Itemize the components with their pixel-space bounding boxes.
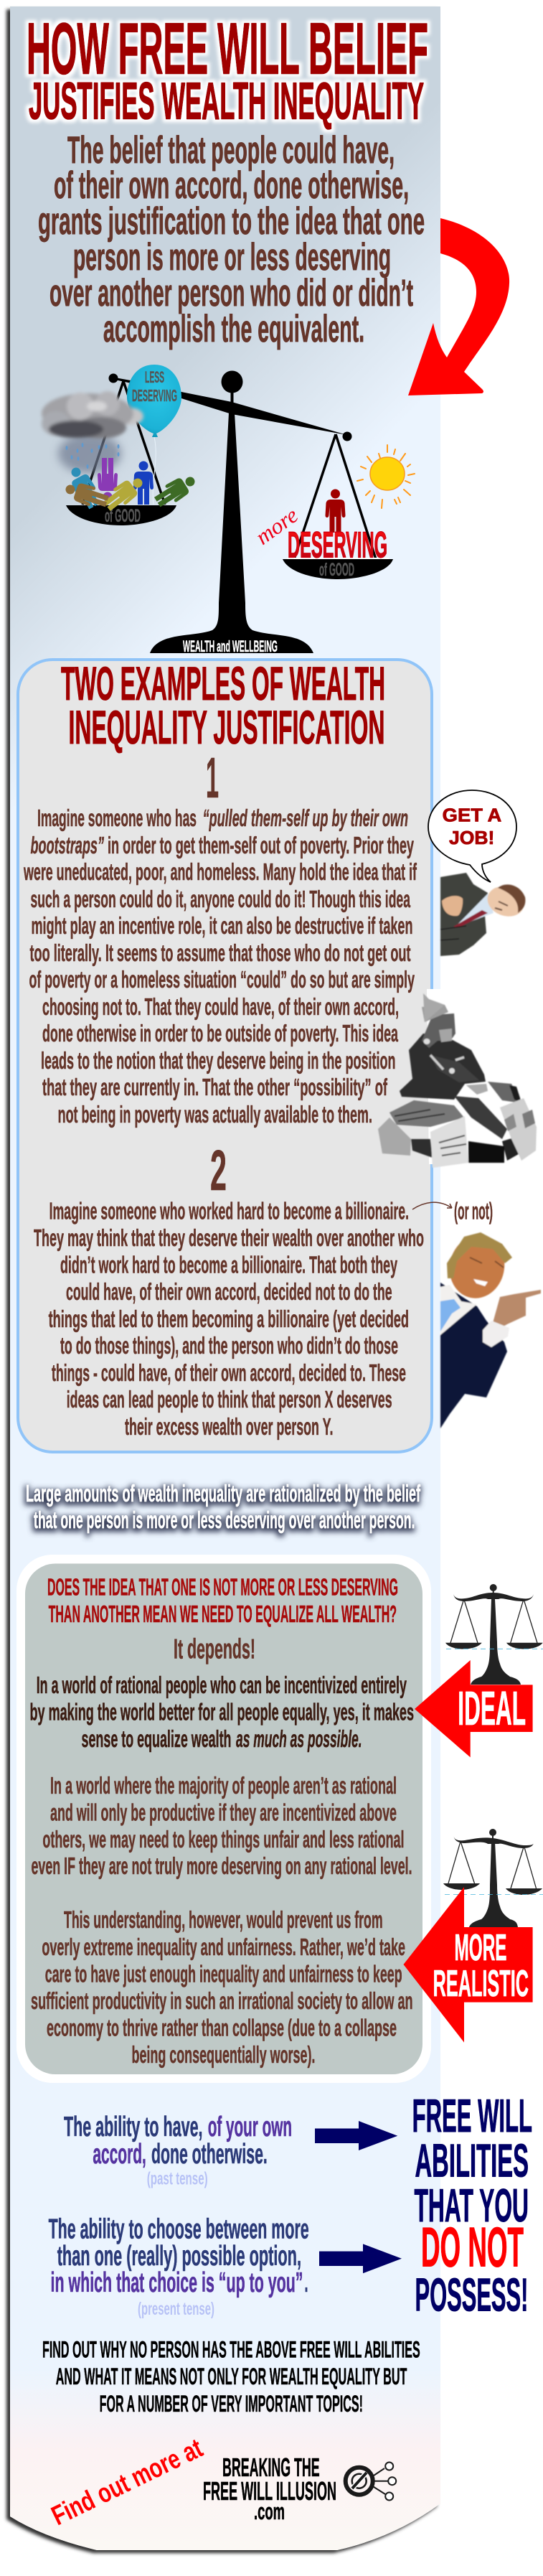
infographic: (or not) [454, 1198, 493, 1224]
definition: present tense ability: (present tense) [138, 2299, 214, 2319]
annotation: or not [412, 1198, 493, 1224]
balloon: less deserving [127, 365, 181, 505]
definition: present tense ability: The ability to choose between more [49, 2214, 309, 2245]
call to action text [42, 2337, 420, 2417]
balance scale illustration: of GOOD [105, 506, 141, 526]
people on left pan [62, 458, 199, 515]
intro text [38, 129, 425, 350]
cloud [42, 391, 143, 439]
website name [203, 2453, 336, 2524]
website name: BREAKING THE [222, 2453, 320, 2482]
statement: abilities you do not possess [412, 2089, 532, 2320]
numeral 2: 2 [210, 1138, 227, 1202]
icon: curved red arrow [408, 218, 509, 395]
example 1 text [23, 805, 417, 1128]
definition: present tense ability [49, 2214, 309, 2319]
definition: present tense ability: in which that choice is “up to you” [50, 2267, 303, 2298]
definition: past tense ability [64, 2112, 292, 2189]
panel lower fade [10, 2369, 440, 2550]
panel shadow [6, 9, 437, 2553]
balance scale illustration: of GOOD [319, 560, 354, 580]
arrow: present tense [319, 2244, 402, 2273]
definition: past tense ability: (past tense) [147, 2169, 208, 2189]
definition: past tense ability: accord, [93, 2139, 146, 2170]
speech bubble: get a job: JOB! [449, 827, 494, 848]
website name: FREE WILL ILLUSION [203, 2476, 336, 2506]
ideal paragraph: as much as possible. [236, 1725, 362, 1752]
infographic: 1 [206, 746, 219, 810]
realistic paragraph [32, 1772, 412, 1879]
website name: .com [254, 2498, 285, 2524]
panel: question box [16, 1555, 431, 2083]
example 2 text [34, 1198, 424, 1440]
arrow: past tense [315, 2121, 397, 2150]
example 1 text: bootstraps” [30, 832, 104, 858]
arrow: ideal [415, 1660, 533, 1757]
icon: balanced scale [445, 1584, 543, 1685]
person on right pan [326, 490, 346, 533]
illustration: billionaire pointing [440, 1230, 541, 1428]
definition: past tense ability: done otherwise. [151, 2139, 268, 2170]
understanding paragraph: being consequentially worse). [132, 2041, 315, 2068]
ideal paragraph [30, 1672, 414, 1752]
arrow: more realistic [403, 1887, 533, 2043]
definition: present tense ability: than one (really) possible option, [57, 2241, 301, 2272]
understanding paragraph [31, 1906, 413, 2068]
more deserving label: more [251, 502, 303, 550]
balance scale illustration [42, 365, 415, 655]
rain [58, 434, 121, 474]
scale beam and stand [66, 370, 393, 653]
example 1 text: Imagine someone who has [37, 805, 197, 831]
callout: wealth inequality rationalized [26, 1480, 421, 1533]
title [27, 9, 428, 131]
icon: logo [346, 2462, 396, 2501]
icon: sun [357, 445, 415, 508]
illustration: man pointing [440, 873, 528, 956]
balance scale illustration: WEALTH and WELLBEING [183, 637, 278, 655]
definition: present tense ability: . [304, 2267, 308, 2298]
heading: two examples [61, 657, 385, 754]
speech bubble: get a job [428, 790, 516, 882]
example 2 text: their excess wealth over person Y. [125, 1413, 333, 1440]
icon: tilted scale [443, 1829, 543, 1927]
more deserving label [251, 502, 389, 566]
ideal paragraph: sense to equalize wealth [82, 1725, 231, 1752]
definition: past tense ability: The ability to have, [64, 2112, 202, 2142]
question heading [47, 1573, 398, 1627]
find out more at: Find out more at [47, 2433, 207, 2531]
balloon: less deserving: DESERVING [132, 386, 177, 405]
speech bubble: get a job: GET A [443, 804, 502, 825]
panel background [10, 6, 440, 2550]
panel: two examples box [18, 660, 432, 1452]
balloon: less deserving: LESS [145, 368, 164, 386]
illustration: homeless man [378, 989, 537, 1168]
definition: past tense ability: of your own [208, 2112, 292, 2142]
it depends: It depends! [174, 1634, 255, 1665]
balance scale illustration: DESERVING [288, 524, 387, 566]
